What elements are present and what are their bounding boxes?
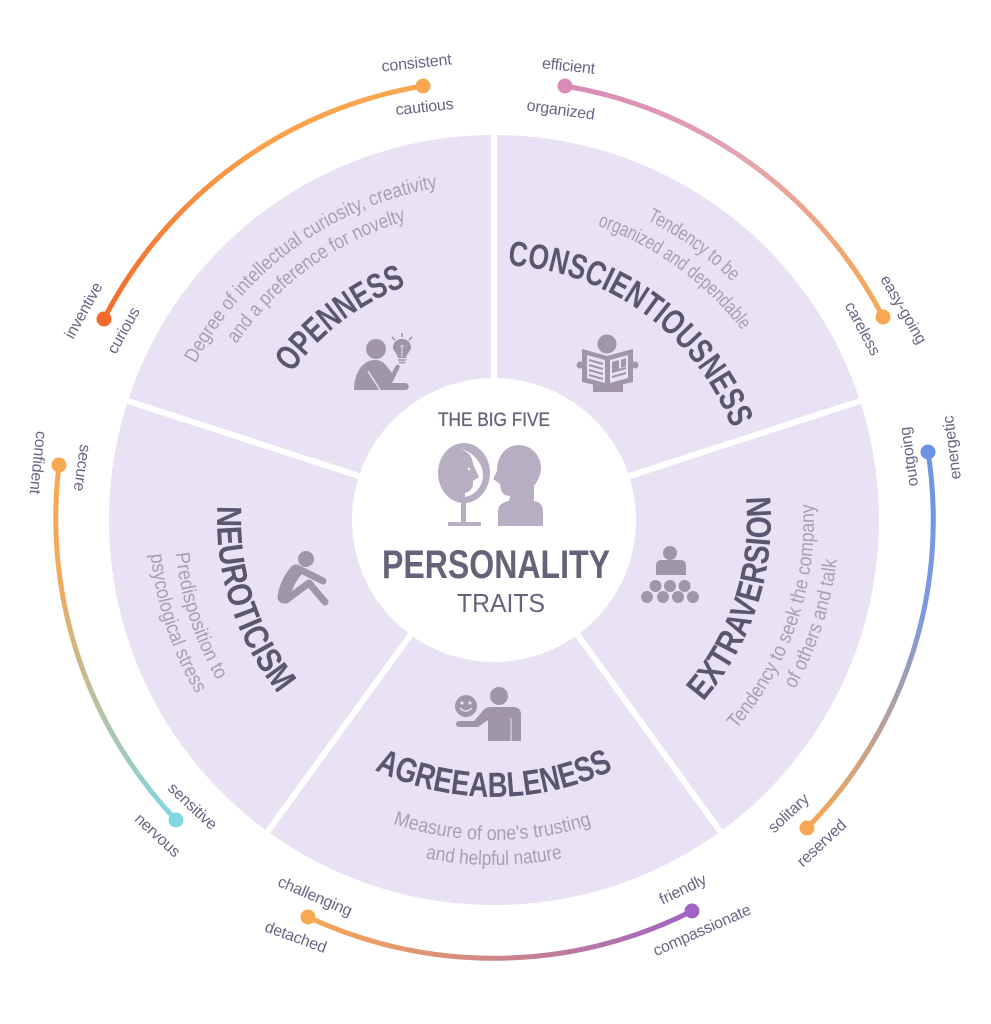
description: neuroticism line 2: psycological stress bbox=[146, 554, 204, 692]
icon: person holding smiley mask bbox=[455, 687, 521, 741]
arc: agreeableness scale bbox=[262, 871, 754, 960]
panel: conscientiousness bbox=[497, 135, 859, 473]
description: neuroticism line 1: Predisposition to bbox=[176, 552, 225, 678]
arc: extraversion scale: reserved bbox=[794, 817, 850, 871]
arc: extraversion scale: solitary bbox=[765, 791, 813, 837]
panel: openness bbox=[129, 135, 491, 473]
arc: neuroticism scale: secure bbox=[70, 443, 93, 492]
icon: person with light bulb bbox=[354, 333, 412, 390]
arc: openness scale: curious bbox=[104, 305, 144, 357]
heading: agreeableness: AGREEABLENESS bbox=[375, 750, 610, 797]
arc: conscientiousness scale: organized bbox=[526, 97, 596, 124]
arc: agreeableness scale: friendly bbox=[657, 871, 709, 909]
arc: neuroticism scale: sensitive bbox=[164, 780, 220, 834]
arc: openness scale: cautious bbox=[395, 96, 454, 119]
arc: agreeableness scale: detached bbox=[262, 919, 329, 957]
arc: extraversion scale: energetic bbox=[940, 415, 965, 480]
arc: extraversion scale: outgoing bbox=[897, 426, 922, 487]
panel: agreeableness bbox=[270, 636, 718, 905]
arc: conscientiousness scale: easy-going bbox=[876, 272, 929, 347]
arc: extraversion scale bbox=[765, 415, 965, 871]
arc: openness scale: inventive bbox=[62, 280, 107, 342]
label: the big five: THE BIG FIVE bbox=[438, 409, 550, 431]
icon: person reading newspaper bbox=[576, 334, 638, 392]
arc: neuroticism scale bbox=[26, 430, 220, 861]
icon: person facing mirror bbox=[438, 443, 543, 526]
label: traits: TRAITS bbox=[457, 588, 545, 618]
heading: personality: PERSONALITY bbox=[382, 543, 610, 587]
heading: extraversion: EXTRAVERSION bbox=[686, 498, 772, 700]
heading: conscientiousness: CONSCIENTIOUSNESS bbox=[510, 242, 752, 426]
center title block bbox=[352, 378, 636, 662]
description: conscientiousness line 2: organized and dependable bbox=[599, 216, 748, 329]
arc: openness scale: consistent bbox=[381, 51, 453, 76]
arc: agreeableness scale: compassionate bbox=[651, 902, 754, 960]
description: agreeableness line 2: and helpful nature bbox=[426, 848, 561, 869]
arc: conscientiousness scale: efficient bbox=[541, 55, 596, 78]
arc: agreeableness scale: challenging bbox=[275, 874, 354, 920]
panel: neuroticism bbox=[109, 404, 408, 832]
heading: openness: OPENNESS bbox=[276, 266, 404, 368]
description: openness line 1: Degree of intellectual curiosity, creativity bbox=[184, 176, 436, 362]
description: openness line 2: and a preference for novelty bbox=[230, 210, 403, 342]
panel: extraversion bbox=[580, 404, 879, 830]
description: conscientiousness line 1: Tendency to be bbox=[650, 208, 738, 280]
arc: openness scale bbox=[62, 51, 454, 357]
arc: conscientiousness scale bbox=[526, 55, 929, 359]
heading: neuroticism: NEUROTICISM bbox=[217, 508, 296, 692]
arc: neuroticism scale: nervous bbox=[131, 811, 183, 861]
description: extraversion line 2: of others and talk bbox=[787, 558, 837, 688]
icon: person hugging knees bbox=[284, 551, 325, 602]
arc: neuroticism scale: confident bbox=[26, 430, 49, 496]
arc: conscientiousness scale: careless bbox=[841, 299, 883, 359]
icon: person above crowd bbox=[641, 546, 699, 603]
description: agreeableness line 1: Measure of one's trusting bbox=[394, 811, 591, 840]
description: extraversion line 1: Tendency to seek the company bbox=[726, 504, 818, 726]
